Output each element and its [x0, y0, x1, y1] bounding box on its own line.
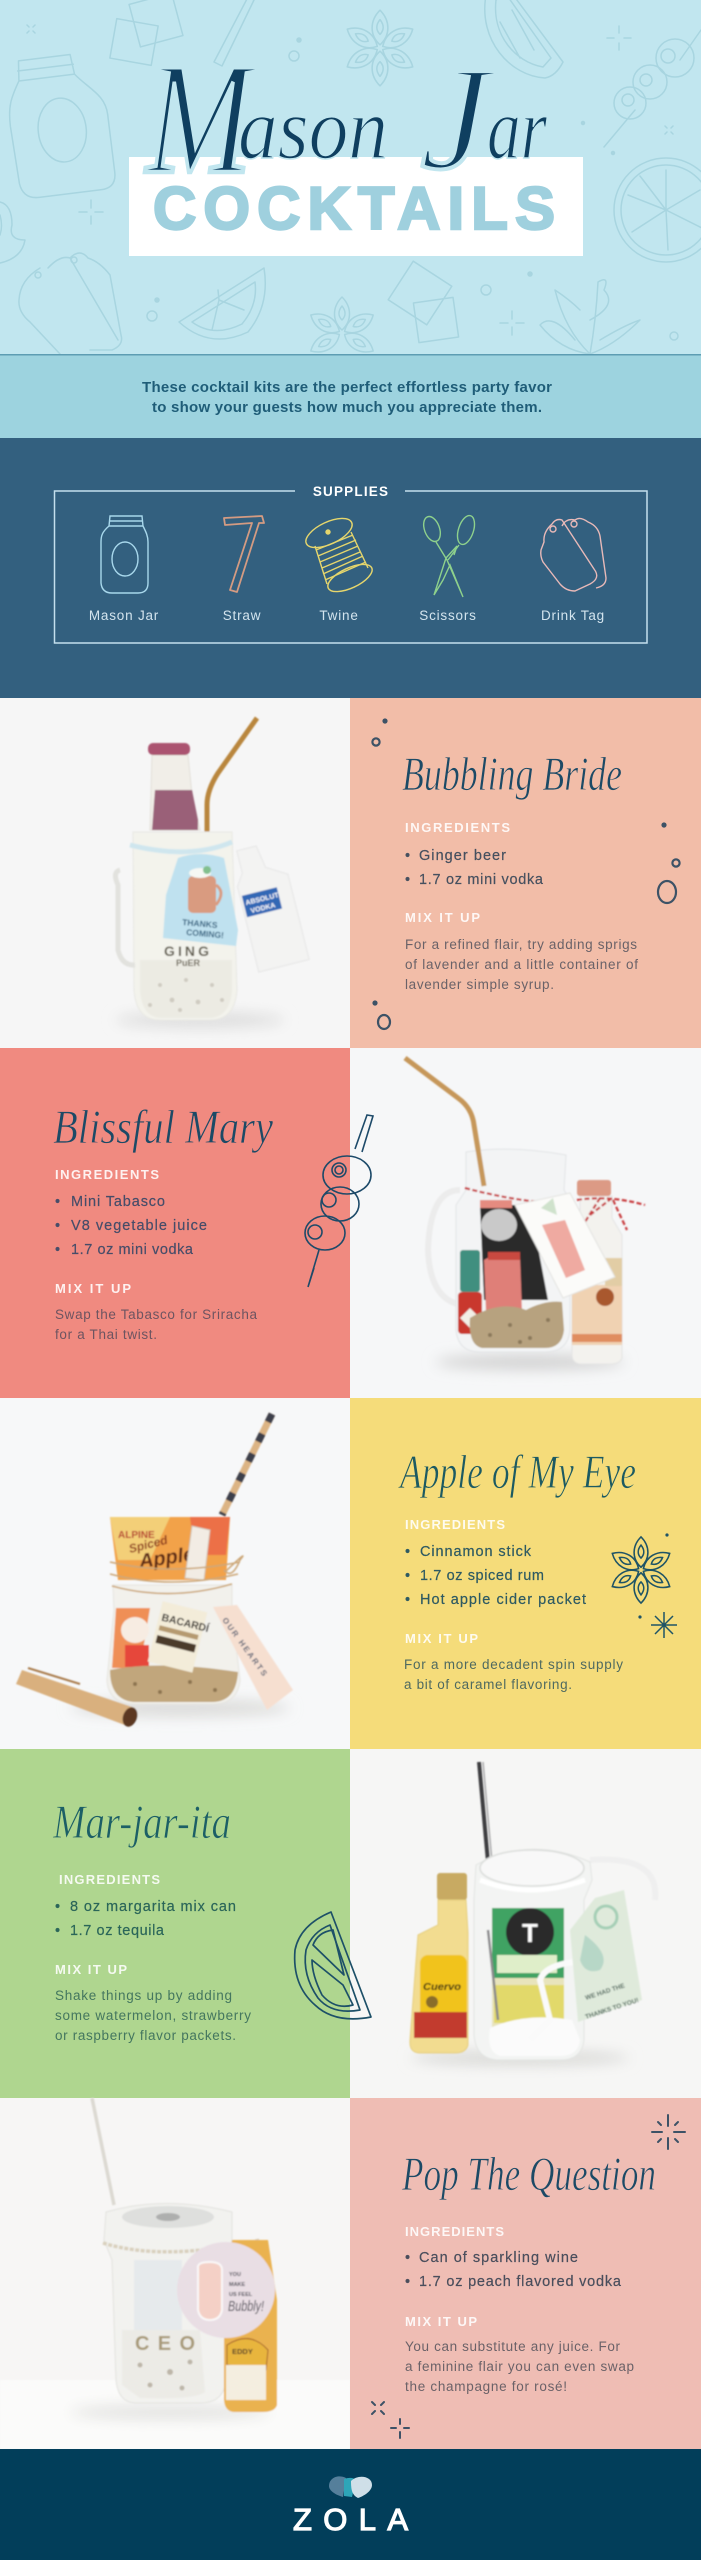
jar filling — [140, 960, 232, 1018]
icon: mason jar — [101, 516, 148, 593]
supply label: twine: Twine — [319, 608, 359, 623]
logo hearts — [329, 2476, 372, 2498]
mix it up: Shake things up by adding — [55, 1988, 232, 2003]
mix it up: or raspberry flavor packets. — [55, 2028, 236, 2043]
doodle: ice cubes top — [110, 0, 183, 65]
supply label: mason jar: Mason Jar — [89, 608, 159, 623]
doodle: left citrus slice — [0, 202, 25, 263]
bacardi label — [148, 1601, 214, 1674]
jar body — [133, 832, 237, 1020]
mix it up: lavender simple syrup. — [405, 977, 554, 992]
doodle: mason jar — [3, 51, 117, 200]
ingredients: • — [405, 872, 410, 888]
panel: blissful mary — [0, 1048, 350, 1398]
intro band: to show your guests how much you appreciate them. — [152, 399, 542, 416]
title: mason jar: J — [420, 37, 497, 201]
red twine — [465, 1188, 645, 1230]
doodle: straw top — [214, 0, 254, 66]
red drink — [484, 1254, 522, 1312]
glass on tag — [198, 2262, 222, 2320]
ingredients: • — [405, 2274, 410, 2290]
ingredients: 1.7 oz mini vodka — [419, 872, 544, 888]
ribbon — [130, 842, 232, 852]
straw — [92, 2098, 114, 2205]
supplies frame — [54, 491, 647, 643]
ingredients: V8 vegetable juice — [71, 1218, 207, 1234]
ingredients: INGREDIENTS — [55, 1167, 159, 1182]
mix it up: MIX IT UP — [405, 1631, 478, 1646]
supply label: straw: Straw — [223, 608, 261, 623]
icon: straw — [224, 516, 264, 592]
ingredients: • — [405, 1544, 410, 1560]
photo: apple of my eye kit: Apple — [137, 1543, 196, 1573]
granola — [470, 1302, 564, 1348]
ingredients: 1.7 oz spiced rum — [420, 1568, 544, 1584]
rim — [480, 1850, 584, 1886]
ingredients: INGREDIENTS — [405, 820, 510, 835]
photo: pop the question kit: Bubbly! — [228, 2298, 265, 2315]
ingredients: Mini Tabasco — [71, 1194, 165, 1210]
mix it up: MIX IT UP — [55, 1962, 127, 1977]
icon: scissors — [421, 513, 478, 597]
photo: pop the question kit: US FEEL — [229, 2292, 253, 2298]
bottle cap — [148, 743, 190, 755]
can pink top — [480, 1200, 512, 1208]
ingredients: INGREDIENTS — [405, 1517, 505, 1532]
mix it up — [55, 1962, 251, 2043]
mix it up: For a refined flair, try adding sprigs — [405, 937, 637, 952]
intro band — [0, 354, 701, 438]
mix it up: a feminine flair you can even swap — [405, 2359, 634, 2374]
granola — [110, 1665, 238, 1702]
photo: mar-jar-ita kit: T — [522, 1918, 538, 1948]
ingredients: Can of sparkling wine — [419, 2250, 578, 2266]
panel: supplies — [0, 438, 701, 698]
ingredients: Cinnamon stick — [420, 1544, 532, 1560]
ingredients: Hot apple cider packet — [420, 1592, 586, 1608]
ingredients: • — [405, 1568, 410, 1584]
title panel: cocktails — [129, 157, 583, 256]
ingredients: INGREDIENTS — [59, 1872, 160, 1887]
mini vodka bottle — [572, 1196, 622, 1364]
title: mason jar: ar — [487, 81, 548, 178]
gift tag — [570, 1890, 642, 2022]
panel: mar-jar-ita — [0, 1749, 350, 2099]
panel: pop the question — [350, 2098, 701, 2449]
margarita can — [492, 1908, 564, 2028]
icon: small star — [651, 1612, 677, 1638]
straw in jar — [488, 1930, 498, 2020]
white filler — [489, 2017, 580, 2056]
photo: apple of my eye kit: Spiced — [127, 1533, 170, 1556]
tequila bottle — [410, 1873, 468, 2053]
photo: apple of my eye kit: ALPINE — [118, 1530, 155, 1541]
jar contents — [112, 1608, 150, 1668]
mix it up — [55, 1281, 257, 1342]
mix it up: a bit of caramel flavoring. — [404, 1677, 572, 1692]
jar glass — [104, 2204, 232, 2403]
doodle: citrus wedge bottom — [179, 268, 265, 339]
striped straw — [222, 1414, 272, 1515]
mix it up — [404, 1631, 623, 1692]
straw — [207, 718, 257, 832]
filling — [122, 2330, 205, 2398]
copper mug — [188, 866, 221, 913]
ingredients: 8 oz margarita mix can — [70, 1899, 236, 1915]
ingredients: • — [405, 2250, 410, 2266]
row: blissful mary — [0, 1048, 701, 1398]
icon: twine — [302, 512, 376, 597]
photo: bubbling bride kit: COMING! — [186, 927, 224, 940]
icon: lime wedge — [295, 1912, 371, 2019]
dark can — [480, 1205, 548, 1300]
icon: sparkle — [652, 2115, 685, 2149]
mix it up: for a Thai twist. — [55, 1327, 157, 1342]
title: mason jar: ason — [238, 81, 388, 178]
steel straw — [479, 1762, 488, 1862]
cinnamon stick — [16, 1670, 135, 1727]
mix it up: MIX IT UP — [55, 1281, 131, 1296]
header doodles — [0, 0, 701, 357]
bubbles — [372, 718, 680, 1029]
ingredients: • — [55, 1218, 60, 1234]
photo: pop the question kit — [0, 2098, 350, 2449]
ingredients: Ginger beer — [419, 848, 506, 864]
jar handle — [590, 1860, 655, 1900]
supply label: scissors: Scissors — [419, 608, 477, 623]
mix it up — [405, 910, 638, 992]
ingredients: • — [55, 1923, 60, 1939]
photo: pop the question kit: CEO — [135, 2333, 195, 2355]
ingredients: • — [55, 1194, 60, 1210]
photo: mar-jar-ita kit: WE HAD THE — [584, 1982, 626, 2002]
photo: mar-jar-ita kit: THANKS TO YOU! — [584, 1997, 640, 2021]
ingredients — [55, 1872, 236, 1939]
ingredients — [405, 1517, 586, 1608]
doodle: star anise top — [343, 10, 417, 86]
mix it up: Swap the Tabasco for Sriracha — [55, 1307, 257, 1322]
white ribbon — [530, 1962, 575, 2040]
bottle label — [152, 790, 198, 830]
photo: bubbling bride kit: THANKS — [182, 917, 218, 930]
vodka bottle — [229, 840, 309, 972]
row: pop the question — [0, 2098, 701, 2449]
icon: star anise — [609, 1537, 673, 1603]
mix it up: the champagne for rosé! — [405, 2379, 567, 2394]
mix it up: some watermelon, strawberry — [55, 2008, 251, 2023]
photo: mar-jar-ita kit — [350, 1749, 701, 2099]
mix it up: MIX IT UP — [405, 910, 480, 925]
cider packet — [110, 1517, 230, 1580]
footer — [0, 2449, 701, 2560]
script title: Mar-jar-ita — [52, 1796, 231, 1849]
jar handle — [428, 1190, 462, 1305]
script title: Blissful Mary — [53, 1101, 274, 1154]
supply label: drink tag: Drink Tag — [541, 608, 605, 623]
jar body — [474, 1849, 592, 2060]
icon: drink tags — [541, 518, 606, 591]
row: mar-jar-ita — [0, 1749, 701, 2099]
gift tag — [515, 1193, 615, 1298]
doodle: herb — [540, 280, 640, 354]
peach bottle — [224, 2240, 277, 2412]
photo: pop the question kit: EDDY — [232, 2347, 253, 2356]
ingredients — [55, 1167, 207, 1258]
photo: blissful mary kit — [350, 1048, 701, 1398]
doodle: sparkles — [27, 25, 673, 335]
twine — [103, 2240, 260, 2252]
ingredients: INGREDIENTS — [405, 2224, 504, 2239]
doodle: citrus wheel — [614, 158, 701, 262]
title: mason jar: M — [144, 29, 258, 207]
header — [0, 0, 701, 357]
bottle neck — [150, 755, 200, 830]
jar glass — [456, 1149, 570, 1352]
intro band: These cocktail kits are the perfect effortless party favor — [142, 379, 552, 396]
bacardi label: BACARDÍ — [160, 1611, 211, 1635]
doodle: ice cubes bottom — [388, 261, 459, 343]
supplies heading: SUPPLIES — [313, 484, 389, 499]
tequila bottle: Cuervo — [423, 1982, 461, 1993]
title panel: cocktails: COCKTAILS — [153, 175, 555, 242]
doodle: bubbles — [147, 38, 678, 340]
ingredients: • — [55, 1242, 60, 1258]
round tag — [177, 2242, 275, 2338]
mix it up: of lavender and a little container of — [405, 957, 638, 972]
doodle: drink tags — [19, 253, 122, 354]
ingredients: 1.7 oz tequila — [70, 1923, 165, 1939]
can body — [134, 2260, 182, 2332]
photo: apple of my eye kit — [0, 1398, 350, 1749]
photo: apple of my eye kit: OUR HEARTS — [220, 1616, 269, 1678]
gift tag — [163, 854, 238, 946]
vodka bottle: ABSOLUT — [245, 892, 280, 907]
photo: pop the question kit: MAKE — [229, 2282, 246, 2288]
gift tag — [213, 1605, 293, 1710]
ingredients: 1.7 oz mini vodka — [71, 1242, 194, 1258]
mini rum top — [185, 1526, 210, 1580]
panel: bubbling bride — [350, 698, 701, 1049]
ingredients — [405, 2224, 622, 2290]
panel: apple of my eye — [350, 1398, 701, 1749]
doodle: citrus wedge top — [485, 0, 563, 78]
ingredients: 1.7 oz peach flavored vodka — [419, 2274, 622, 2290]
icon: olive skewer — [305, 1115, 373, 1287]
row: bubbling bride — [0, 698, 701, 1049]
mix it up: MIX IT UP — [405, 2314, 477, 2329]
icon: small sparkles — [372, 2402, 409, 2438]
mix it up: For a more decadent spin supply — [404, 1657, 623, 1672]
ingredients: • — [405, 1592, 410, 1608]
photo: bubbling bride kit — [0, 698, 350, 1049]
vodka bottle: VODKA — [250, 902, 276, 915]
snow surface — [0, 2380, 350, 2449]
ingredients: • — [405, 848, 410, 864]
mix it up — [405, 2314, 634, 2394]
doodle: olive skewer — [604, 30, 701, 147]
tabasco bottle — [460, 1250, 480, 1292]
row: apple of my eye — [0, 1398, 701, 1749]
twine — [110, 1556, 243, 1594]
ingredients: • — [55, 1899, 60, 1915]
photo: bubbling bride kit: PuER — [176, 958, 201, 968]
script title: Bubbling Bride — [402, 748, 622, 801]
can top — [122, 2206, 214, 2228]
jar body — [107, 1585, 240, 1704]
doodle: star anise bottom — [307, 297, 377, 357]
ingredients — [405, 820, 544, 888]
jar text: GING — [164, 943, 209, 959]
mix it up: You can substitute any juice. For — [405, 2339, 620, 2354]
logo wordmark: ZOLA — [293, 2502, 408, 2537]
gold straw — [405, 1058, 484, 1186]
dots — [638, 1533, 669, 1619]
photo: pop the question kit: YOU — [229, 2272, 241, 2278]
